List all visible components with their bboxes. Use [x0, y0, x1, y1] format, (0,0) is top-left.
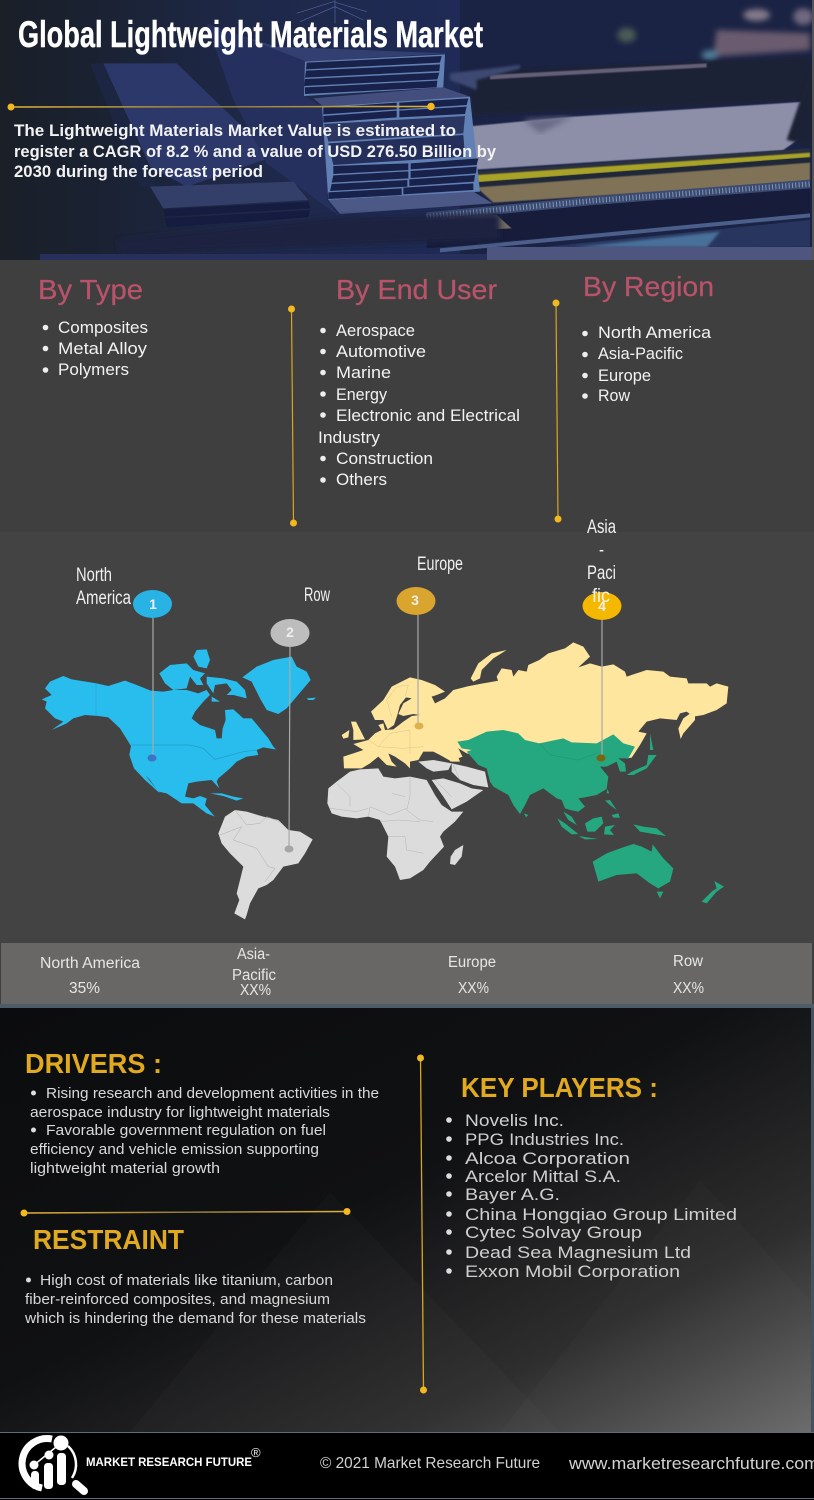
panel: regional share strip: Asia-	[237, 946, 270, 963]
marker 4: Asia-Pacific	[582, 592, 622, 762]
panel: footer	[0, 1432, 814, 1500]
marker 1: North America: 1	[149, 596, 157, 612]
copyright: © 2021 Market Research Future	[320, 1455, 540, 1472]
key players: Novelis Inc.	[465, 1111, 564, 1130]
map labels: -	[599, 540, 604, 561]
By End User column: Marine	[336, 363, 391, 382]
map labels: America	[76, 588, 131, 609]
drivers: DRIVERS :	[25, 1048, 162, 1079]
By Region column: By Region	[583, 271, 714, 302]
map labels: North	[76, 565, 112, 586]
By End User column	[318, 274, 520, 489]
gold divider	[8, 103, 435, 110]
panel: regional share strip: North America	[40, 955, 140, 972]
header bottom band	[40, 0, 814, 260]
brand name: MARKET RESEARCH FUTURE	[86, 1457, 252, 1469]
By Type column: Polymers	[58, 360, 129, 379]
By Type column: Composites	[58, 318, 148, 337]
panel: regional share strip: 35%	[69, 980, 100, 997]
map labels: Paci	[587, 563, 616, 584]
panel: world map	[0, 517, 814, 943]
panel: drivers, restraint and key players	[0, 1008, 814, 1432]
key players: Exxon Mobil Corporation	[465, 1262, 680, 1281]
drivers	[25, 1048, 379, 1177]
key players: Arcelor Mittal S.A.	[465, 1167, 621, 1186]
divider: type / end user	[288, 306, 297, 526]
key players: Cytec Solvay Group	[465, 1223, 642, 1242]
By Type column: Metal Alloy	[58, 339, 148, 358]
By End User column: Aerospace	[336, 321, 415, 340]
divider: end user / region	[552, 300, 562, 522]
marker 1: North America	[133, 590, 172, 762]
restraint	[24, 1224, 366, 1327]
By Region column: Row	[598, 386, 631, 405]
summary text: The Lightweight Materials Market Value is estimated to	[14, 122, 456, 140]
header photo: factory floor background	[427, 0, 814, 260]
drivers: lightweight material growth	[30, 1160, 220, 1177]
restraint: which is hindering the demand for these materials	[24, 1310, 366, 1327]
By End User column: Construction	[336, 449, 433, 468]
divider: vertical gold	[417, 1054, 427, 1394]
title: Global Lightweight Materials Market	[18, 14, 483, 55]
panel: segments	[0, 260, 814, 532]
By Type column: By Type	[38, 274, 143, 305]
key players: Bayer A.G.	[465, 1185, 560, 1204]
key players	[446, 1072, 737, 1281]
By End User column: Automotive	[336, 342, 426, 361]
panel: regional share strip: Europe	[448, 954, 496, 971]
region: Asia-Pacific	[457, 730, 724, 903]
By Region column	[582, 271, 714, 405]
marker 2: Row	[270, 619, 310, 852]
region: Europe and Russia	[342, 642, 728, 768]
seas: Caspian	[458, 748, 477, 768]
By Region column: North America	[598, 323, 712, 342]
map labels: fic	[592, 586, 610, 607]
By Region column: Europe	[598, 366, 651, 385]
marker 3: Europe	[396, 587, 436, 730]
By Type column	[38, 274, 148, 379]
summary text: 2030 during the forecast period	[14, 163, 263, 181]
panel: regional share strip: Pacific	[232, 967, 276, 984]
drivers: Rising research and development activities in the	[46, 1085, 379, 1102]
By End User column: Electronic and Electrical	[336, 406, 520, 425]
website: www.marketresearchfuture.com	[568, 1454, 814, 1473]
marker 3: Europe: 3	[411, 592, 419, 608]
By Region column: Asia-Pacific	[598, 344, 683, 363]
key players: PPG Industries Inc.	[465, 1130, 624, 1149]
restraint: High cost of materials like titanium, carbon	[40, 1272, 333, 1289]
panel: header	[0, 0, 814, 260]
key players: KEY PLAYERS :	[461, 1072, 658, 1103]
registered mark: ®	[251, 1445, 261, 1460]
By End User column: Energy	[336, 385, 387, 404]
region: Africa and Middle East	[327, 760, 488, 880]
summary text: register a CAGR of 8.2 % and a value of USD 276.50 Billion by	[14, 143, 497, 161]
icon: logo	[22, 1436, 84, 1491]
panel: regional share strip: Row	[673, 953, 704, 970]
header photo: stacked metal profiles	[90, 0, 500, 253]
key players: China Hongqiao Group Limited	[465, 1205, 737, 1224]
region: North America	[42, 649, 316, 817]
summary text	[14, 122, 497, 181]
marker 4: Asia-Pacific: 4	[598, 598, 606, 614]
panel: regional share strip: XX%	[673, 980, 704, 997]
By End User column: By End User	[336, 274, 497, 305]
map labels: Row	[304, 585, 330, 606]
drivers: aerospace industry for lightweight materials	[30, 1104, 330, 1121]
region: South America	[218, 810, 313, 919]
map labels	[76, 517, 616, 609]
panel: regional share strip	[0, 943, 814, 1008]
key players: Dead Sea Magnesium Ltd	[465, 1243, 691, 1262]
marker 2: Row: 2	[286, 624, 294, 640]
restraint: fiber-reinforced composites, and magnesium	[25, 1291, 330, 1308]
map labels: Asia	[587, 517, 616, 538]
restraint: RESTRAINT	[33, 1224, 184, 1255]
key players: Alcoa Corporation	[465, 1149, 630, 1168]
panel: regional share strip: XX%	[240, 982, 271, 999]
panel: regional share strip: XX%	[458, 980, 489, 997]
drivers: efficiency and vehicle emission supporting	[30, 1141, 319, 1158]
drivers: Favorable government regulation on fuel	[46, 1122, 326, 1139]
By End User column: Others	[336, 470, 387, 489]
divider: drivers / restraint	[20, 1208, 350, 1216]
map labels: Europe	[417, 554, 463, 575]
By End User column: Industry	[318, 428, 380, 447]
